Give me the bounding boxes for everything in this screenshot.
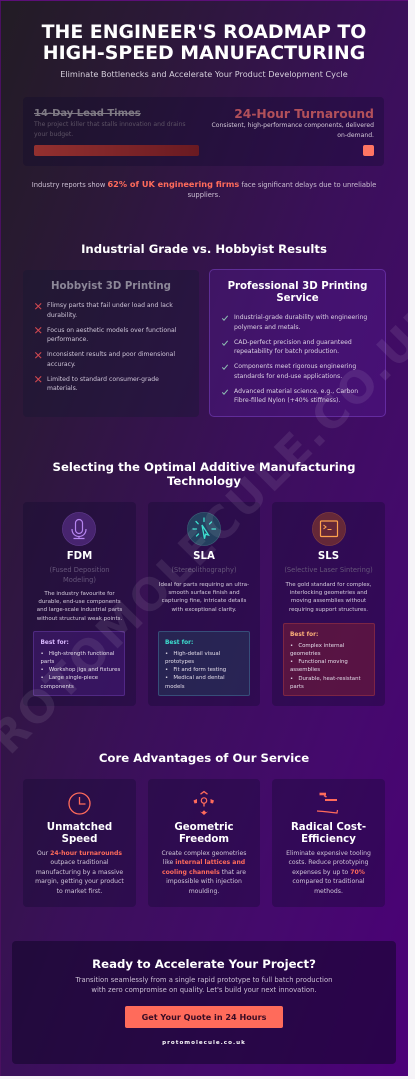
professional item two: repeatability for batch production. — [234, 348, 339, 355]
professional item two: CAD-perfect precision and guaranteed — [234, 338, 352, 346]
SLS description: moving assemblies without — [291, 598, 366, 604]
cost text: compared to traditional — [292, 878, 365, 885]
freedom text — [162, 850, 246, 895]
hobbyist item one: durability. — [47, 312, 77, 319]
FDM name: FDM — [67, 551, 92, 562]
SLS subtitle: (Selective Laser Sintering) — [284, 566, 373, 574]
panel: speed — [23, 779, 136, 907]
hobbyist heading: Hobbyist 3D Printing — [51, 280, 171, 292]
professional item one — [234, 314, 367, 331]
subtitle: Eliminate Bottlenecks and Accelerate Your Product Development Cycle — [60, 69, 348, 79]
speed text: to market first. — [57, 888, 102, 895]
FDM description: The industry favourite for — [44, 591, 115, 597]
cta button — [125, 1006, 283, 1028]
best for list: parts — [290, 684, 304, 690]
FDM description: without structural weak points. — [37, 616, 122, 622]
panel: SLS — [272, 502, 385, 706]
heading: technology — [53, 460, 355, 488]
best for label: Best for: — [40, 640, 69, 646]
panel: FDM — [23, 502, 136, 706]
freedom heading: Geometric — [174, 822, 234, 832]
best for list: • High-detail visual — [165, 651, 220, 657]
professional heading: Service — [276, 293, 319, 304]
best for list — [165, 651, 226, 690]
hobbyist item two — [47, 326, 176, 343]
professional item four — [234, 388, 358, 404]
heading: comparison: Industrial Grade vs. Hobbyist Results — [81, 242, 327, 256]
SLS description: The gold standard for complex, — [285, 582, 372, 588]
cost text: Eliminate expensive tooling — [286, 850, 371, 856]
professional item four: Advanced material science, e.g., Carbon — [234, 388, 358, 394]
cta button: Get Your Quote in 24 Hours — [142, 1012, 266, 1022]
check icon — [222, 364, 228, 370]
new turnaround text: on-demand. — [337, 132, 374, 139]
best for list: parts — [40, 659, 54, 665]
cost heading: Radical Cost- — [291, 822, 366, 832]
FDM description — [37, 591, 122, 622]
FDM best for — [33, 631, 125, 696]
footer url: protomolecule.co.uk — [162, 1040, 246, 1046]
cta text: Transition seamlessly from a single rapid prototype to full batch production — [76, 976, 332, 984]
professional item four: Fibre-filled Nylon (+40% stiffness). — [234, 397, 340, 404]
best for list — [40, 651, 120, 690]
best for list: • Durable, heat-resistant — [290, 676, 361, 682]
speed text: margin, getting your product — [35, 878, 124, 885]
check icon — [222, 390, 228, 395]
heading: technology: Technology — [167, 474, 241, 488]
icon: microphone — [62, 512, 96, 546]
SLA best for — [158, 631, 250, 696]
FDM subtitle — [49, 566, 110, 584]
best for list: • High-strength functional — [40, 651, 114, 657]
SLA subtitle: (Stereolithography) — [171, 566, 237, 574]
best for list: assemblies — [290, 667, 320, 673]
cost text — [272, 848, 385, 896]
freedom text: like internal lattices and — [163, 859, 245, 866]
panel: freedom — [148, 779, 260, 907]
FDM description: and large-scale industrial parts — [37, 607, 122, 613]
best for list: • Medical and dental — [165, 675, 225, 681]
cross icon — [35, 352, 42, 358]
hobbyist item three: Inconsistent results and poor dimensional — [47, 351, 175, 358]
best for list: • Complex internal — [290, 643, 344, 649]
heading: advantages: Core Advantages of Our Service — [99, 750, 309, 764]
SLS description — [285, 582, 372, 613]
professional item two — [234, 338, 352, 355]
freedom text: impossible with injection — [166, 878, 242, 885]
icon: laser cursor — [187, 512, 221, 546]
best for list: • Workshop jigs and fixtures — [40, 667, 120, 673]
speed text — [35, 850, 124, 895]
panel: hobbyist — [23, 270, 199, 417]
freedom text: cooling channels that are — [162, 869, 246, 876]
speed text: outpace traditional — [50, 859, 109, 866]
professional item three — [234, 363, 356, 380]
best for list: models — [165, 684, 185, 690]
SLA description: Ideal for parts requiring an ultra- — [159, 582, 249, 588]
title: HIGH-SPEED MANUFACTURING — [43, 42, 365, 64]
speed text: manufacturing by a massive — [36, 869, 123, 876]
SLA description — [159, 582, 249, 613]
old lead time heading: 14-Day Lead Times — [34, 108, 141, 119]
FDM subtitle: Modeling) — [63, 576, 96, 584]
cost text: costs. Reduce prototyping — [289, 859, 368, 866]
check icon — [222, 340, 228, 346]
professional item three: standards for end-use applications. — [234, 373, 342, 380]
hobbyist item four — [47, 376, 159, 392]
cost text: methods. — [314, 888, 343, 895]
cta heading: Ready to Accelerate Your Project? — [92, 957, 316, 971]
best for list: prototypes — [165, 659, 194, 665]
best for list: • Large single-piece — [40, 675, 98, 681]
cost heading: Efficiency — [301, 834, 356, 845]
cost heading — [291, 822, 366, 845]
freedom text: Create complex geometries — [162, 850, 246, 856]
hobbyist item two: Focus on aesthetic models over functional — [47, 326, 176, 334]
new turnaround text — [212, 122, 374, 139]
best for list: • Functional moving — [290, 659, 348, 665]
old lead time bar — [34, 144, 199, 156]
freedom text: moulding. — [189, 888, 219, 895]
statistic callout — [32, 179, 376, 199]
SLA description: smooth surface finish and — [168, 590, 240, 596]
old lead time text: your budget. — [34, 131, 73, 138]
freedom heading: Freedom — [179, 834, 229, 845]
professional item one: polymers and metals. — [234, 324, 301, 331]
cross icon — [35, 376, 42, 382]
freedom heading — [174, 822, 234, 845]
panel: cost — [272, 779, 385, 907]
SLS description: requiring support structures. — [289, 607, 368, 613]
heading: technology: Selecting the Optimal Additive Manufacturing — [53, 460, 355, 474]
panel: lead time comparison — [23, 97, 384, 166]
hobbyist item four: Limited to standard consumer-grade — [47, 376, 159, 382]
professional item three: Components meet rigorous engineering — [234, 363, 356, 370]
FDM description: durable, end-use components — [38, 599, 121, 605]
best for list: • Fit and form testing — [165, 667, 226, 673]
best for list: components — [40, 684, 74, 690]
icon: geometry arrows — [194, 790, 214, 815]
speed heading: Unmatched — [47, 822, 112, 832]
cost text: expenses by up to 70% — [292, 869, 365, 876]
cta text — [12, 976, 396, 995]
hobbyist item three: accuracy. — [47, 361, 76, 368]
cta text: with zero compromise on quality. Let's build your next innovation. — [91, 986, 317, 994]
title — [42, 21, 366, 64]
professional item one: Industrial-grade durability with engineering — [234, 314, 367, 321]
icon: terminal — [312, 512, 346, 546]
hobbyist item one — [47, 302, 173, 319]
new turnaround text: Consistent, high-performance components, delivered — [212, 122, 374, 129]
SLS name: SLS — [318, 551, 339, 562]
check icon — [222, 316, 228, 321]
old lead time text: The project killer that stalls innovation and drains — [34, 121, 186, 128]
cross icon — [35, 327, 42, 334]
speed heading — [47, 822, 112, 845]
SLS description: interlocking geometries and — [290, 590, 367, 596]
hobbyist item two: performance. — [47, 336, 88, 343]
professional heading — [228, 280, 367, 304]
FDM subtitle: (Fused Deposition — [49, 566, 110, 574]
old lead time text — [34, 121, 186, 138]
best for list: geometries — [290, 651, 321, 657]
cross icon — [35, 303, 42, 310]
SLA description: capturing fine, intricate details — [162, 598, 246, 604]
panel: professional — [209, 269, 386, 417]
speed heading: Speed — [62, 834, 97, 845]
hobbyist item three — [47, 351, 175, 368]
icon: clock — [68, 792, 91, 815]
icon: cost tools — [317, 792, 338, 814]
hobbyist item four: materials. — [47, 385, 78, 392]
SLA description: with exceptional clarity. — [171, 607, 237, 613]
new turnaround heading: 24-Hour Turnaround — [234, 107, 374, 121]
statistic callout: suppliers. — [188, 191, 220, 199]
new turnaround bar — [362, 145, 374, 156]
best for label: Best for: — [290, 632, 318, 638]
panel: call to action — [12, 941, 396, 1064]
statistic callout: Industry reports show 62% of UK engineering firms face significant delays due to unreliable — [32, 179, 376, 189]
best for list — [290, 643, 361, 690]
speed text: Our 24-hour turnarounds — [37, 850, 122, 856]
SLA name: SLA — [193, 551, 215, 562]
panel: SLA — [148, 502, 260, 706]
SLS best for — [283, 623, 375, 696]
hobbyist item one: Flimsy parts that fail under load and lack — [47, 302, 173, 309]
professional heading: Professional 3D Printing — [228, 280, 367, 292]
title: THE ENGINEER'S ROADMAP TO — [42, 21, 366, 43]
best for label: Best for: — [165, 640, 193, 646]
